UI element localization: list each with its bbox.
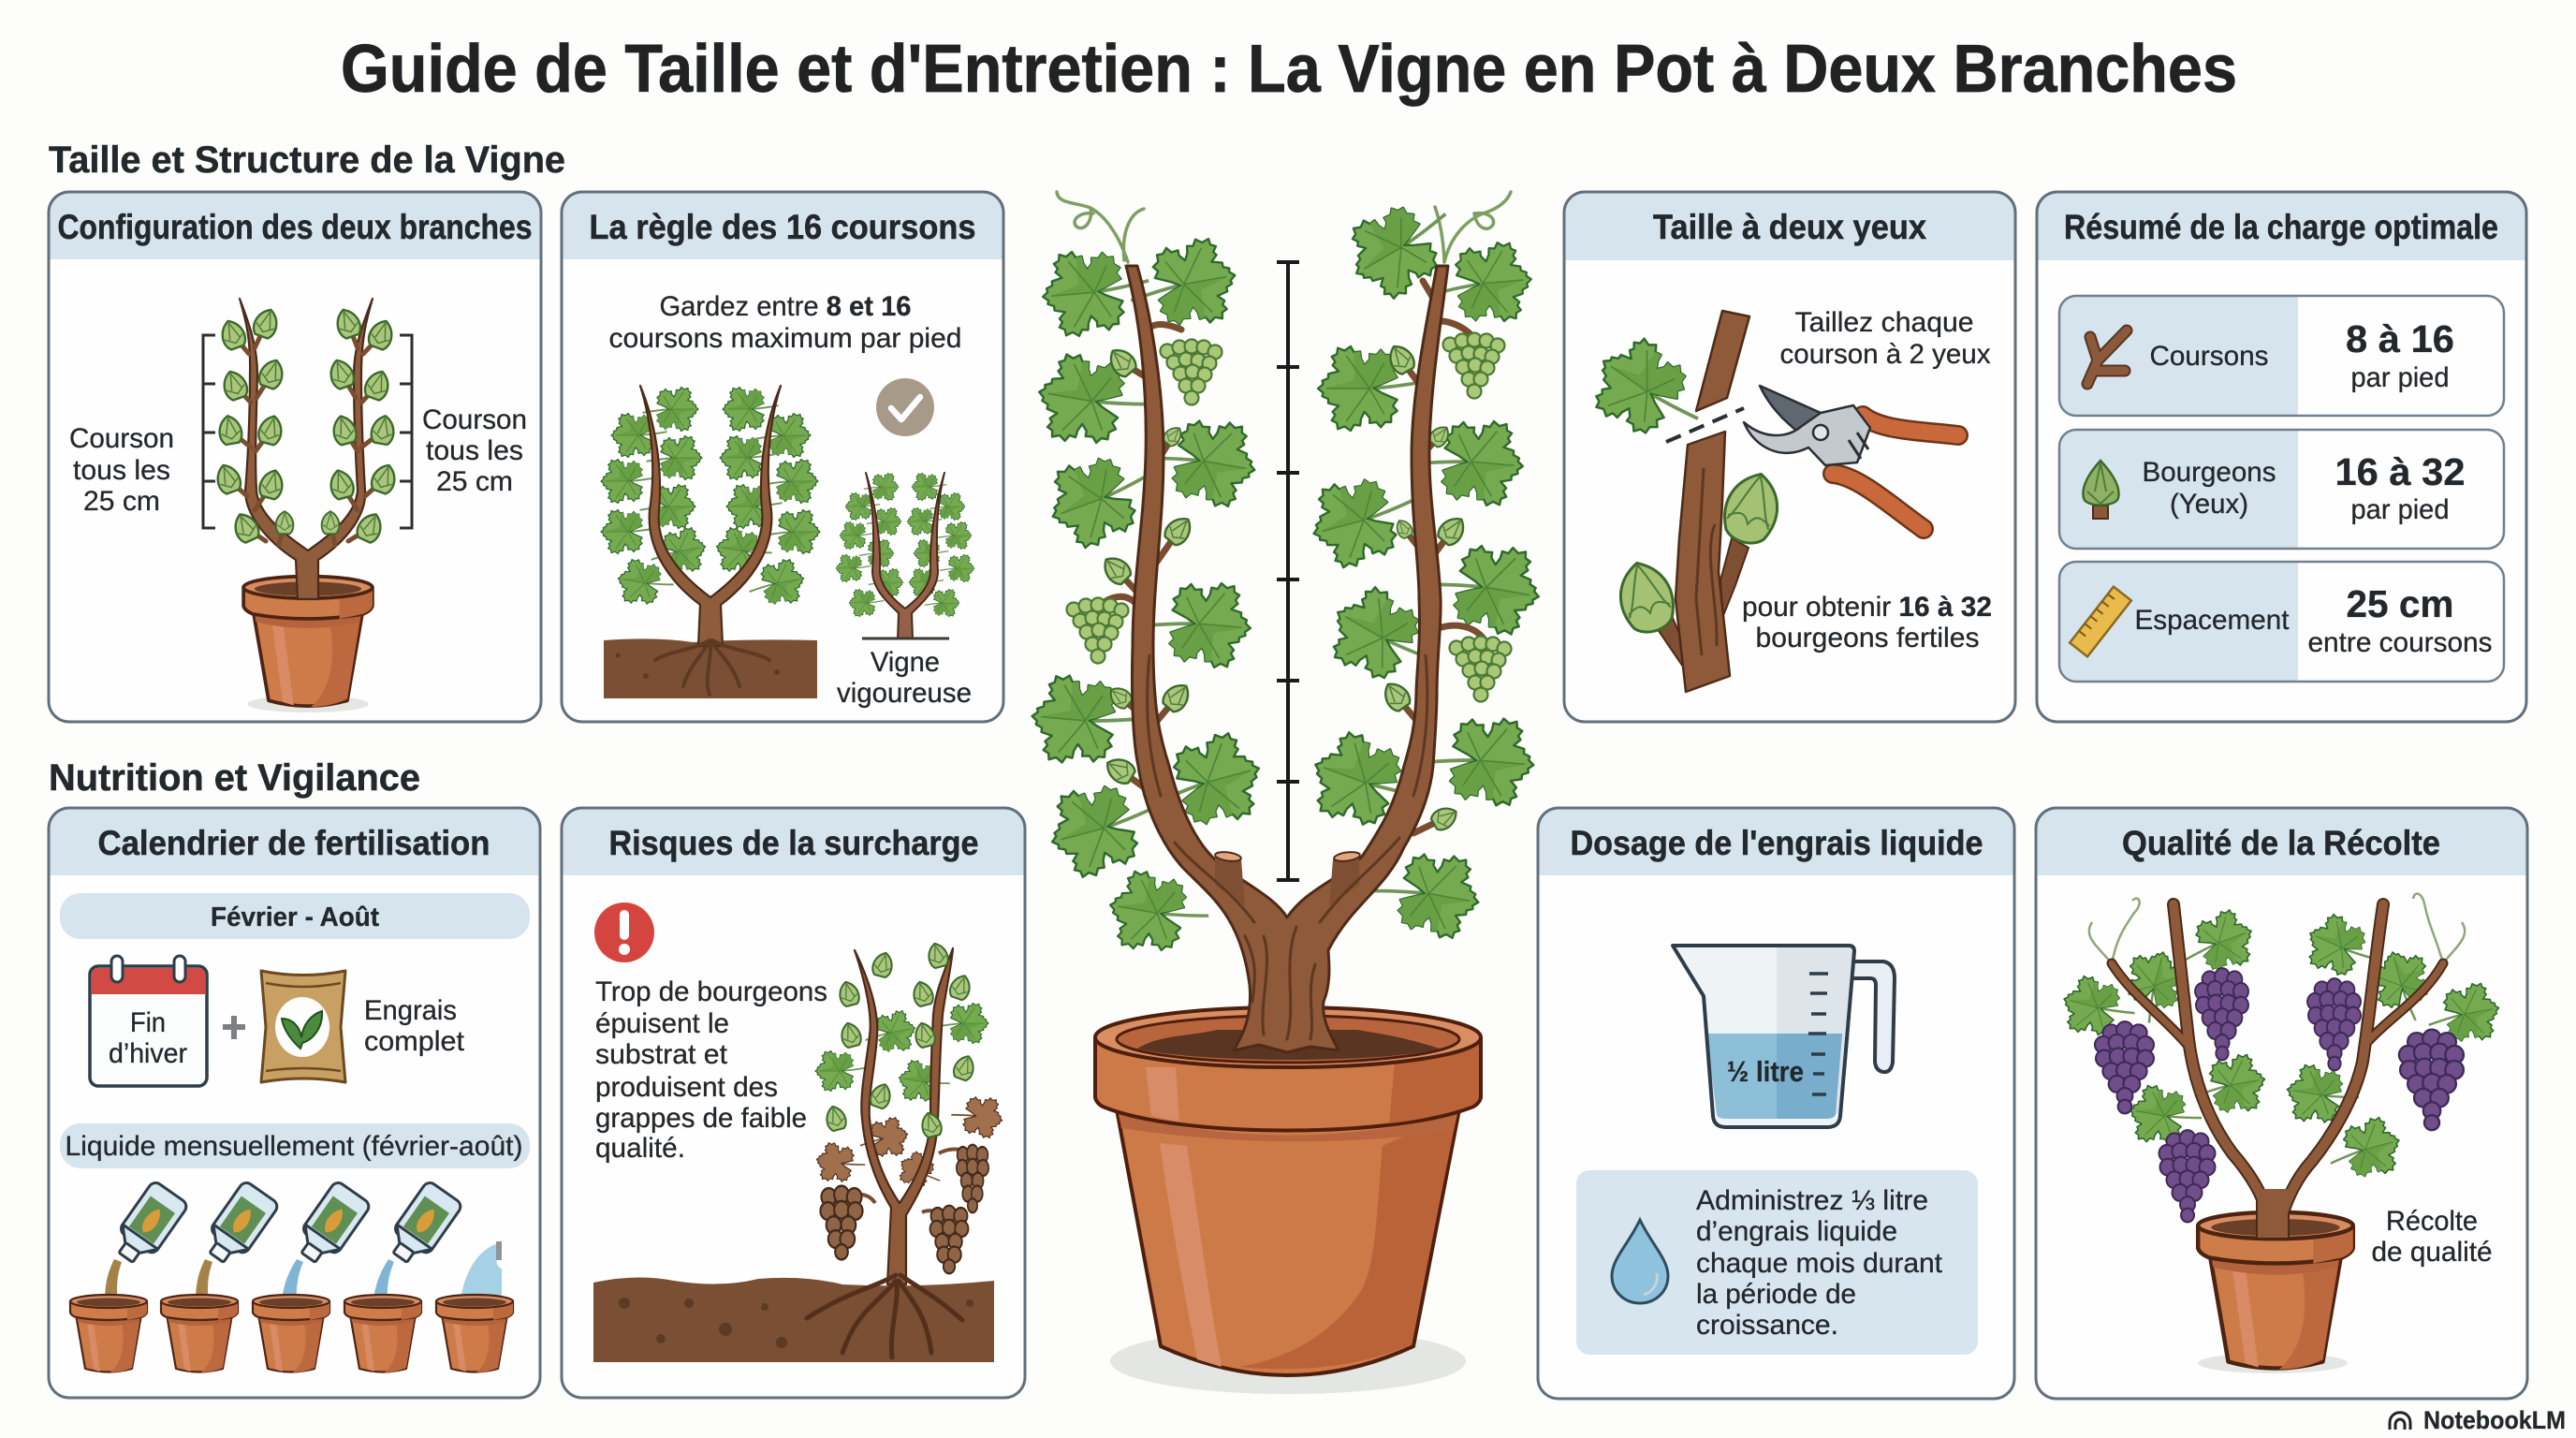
panel heading: Calendrier de fertilisation: [97, 824, 490, 862]
label: left spacing: tous les: [73, 455, 170, 486]
cut line: [1666, 408, 1744, 442]
icon: ruler: [2070, 587, 2131, 656]
label: vigne vigoureuse: Vigne: [871, 647, 940, 678]
label: left spacing: Courson: [69, 423, 174, 454]
panel heading: Qualité de la Récolte: [2122, 824, 2440, 862]
icon: check badge: [876, 378, 934, 436]
panel heading: Configuration des deux branches: [58, 208, 532, 246]
label: right spacing: 25 cm: [436, 466, 513, 497]
cut stubs: [1215, 851, 1360, 906]
label: récolte de qualité: [2372, 1206, 2492, 1268]
buds: [1098, 341, 1470, 832]
pill: liquide mensuellement: [60, 1123, 530, 1168]
row: bourgeons: 16 à 32: [2334, 450, 2466, 493]
pill: février - août: Février - Août: [211, 902, 379, 932]
panel heading: Taille à deux yeux: [1653, 208, 1926, 246]
callout text: Administrez ⅓ litre: [1696, 1185, 1928, 1216]
callout text: croissance.: [1696, 1310, 1838, 1341]
large vine in soil: [601, 386, 820, 698]
central vine illustration: [1029, 183, 1546, 1394]
row: bourgeons: par pied: [2351, 494, 2449, 525]
callout text: [1696, 1185, 1943, 1341]
label: engrais complet: Engrais: [364, 995, 457, 1026]
panel: risques de la surcharge: [562, 808, 1025, 1398]
bud: lower: [1612, 556, 1679, 638]
icon: warning: [594, 902, 654, 962]
row: espacement: 25 cm: [2346, 582, 2454, 625]
warning text: substrat et: [595, 1039, 728, 1070]
label: récolte de qualité: Récolte: [2386, 1206, 2478, 1237]
warning text: Trop de bourgeons: [595, 976, 827, 1007]
warning text: qualité.: [595, 1133, 685, 1164]
label: vigne vigoureuse: vigoureuse: [837, 678, 972, 709]
side shoots: [1097, 281, 1488, 833]
instruction text: [1780, 307, 1990, 370]
grape clusters: [1067, 333, 1511, 702]
NotebookLM logo: NotebookLM: [2423, 1406, 2566, 1434]
panel: qualité de la récolte: [2036, 808, 2527, 1399]
bark texture: [1148, 655, 1427, 1039]
right measure bracket: [400, 335, 412, 528]
small vigorous vine: [836, 473, 974, 638]
heading: Nutrition et Vigilance: Nutrition et Vigilance: [49, 757, 420, 799]
cane lower section with nodes: [1655, 432, 1749, 692]
panel: la règle des 16 coursons: [562, 192, 1003, 722]
row: coursons: Coursons: [2149, 341, 2269, 372]
pots with liquid feed: [70, 1180, 513, 1372]
label: vigne vigoureuse: [837, 647, 972, 709]
pot shadow: [1110, 1328, 1466, 1394]
result text: [1742, 592, 1992, 653]
result text: pour obtenir 16 à 32: [1742, 592, 1992, 623]
row: bourgeons: [2059, 430, 2504, 549]
panel heading: Risques de la surcharge: [608, 824, 979, 862]
rule text: Gardez entre 8 et 16: [659, 291, 912, 322]
fruiting vine in pot: [2056, 894, 2504, 1373]
icon: calendar: [90, 956, 207, 1086]
panel: calendrier de fertilisation: [49, 808, 540, 1398]
warning text: épuisent le: [595, 1008, 729, 1039]
label: left spacing: [69, 423, 174, 517]
callout text: la période de: [1696, 1279, 1856, 1310]
leaf on shoot: [1578, 326, 1719, 460]
row: espacement: Espacement: [2134, 605, 2290, 636]
row: bourgeons: (Yeux): [2170, 489, 2248, 520]
callout text: chaque mois durant: [1696, 1248, 1943, 1279]
label: right spacing: tous les: [426, 435, 523, 466]
icon: measuring jug: ½ litre: [1727, 1055, 1804, 1088]
icon: pruning shears: [1744, 386, 1958, 529]
label: récolte de qualité: de qualité: [2372, 1237, 2492, 1268]
label: left spacing: 25 cm: [83, 486, 160, 517]
vine trunk and branches: [1126, 266, 1448, 1052]
panel: dosage de l'engrais liquide: [1538, 808, 2014, 1399]
cane upper section: [1696, 311, 1749, 411]
callout: dosage: [1576, 1170, 1978, 1355]
icon: calendar: Fin: [130, 1007, 166, 1038]
warning text: [595, 976, 827, 1164]
leaves: [1029, 183, 1546, 961]
icon: water drop: [1612, 1220, 1668, 1303]
panel: résumé de la charge optimale: [2037, 192, 2526, 722]
icon: calendar: d’hiver: [109, 1038, 187, 1069]
icon: fertilizer bag: [261, 971, 345, 1082]
pill: liquide mensuellement: Liquide mensuellement (février-août): [66, 1131, 522, 1162]
exhausted vine in soil: [593, 941, 1005, 1362]
heading: Taille et Structure de la Vigne: Taille et Structure de la Vigne: [49, 139, 565, 181]
callout text: d’engrais liquide: [1696, 1216, 1897, 1247]
rule text: [608, 291, 962, 354]
icon: measuring jug: [1673, 946, 1895, 1127]
result text: bourgeons fertiles: [1756, 623, 1979, 653]
row: espacement: entre coursons: [2308, 627, 2492, 658]
label: right spacing: Courson: [422, 404, 527, 435]
icon: twig: [2087, 330, 2127, 384]
row: espacement: [2059, 562, 2504, 682]
panel: taille à deux yeux: [1564, 192, 2015, 722]
panel heading: Dosage de l'engrais liquide: [1571, 824, 1983, 862]
plus sign: [223, 1016, 245, 1039]
icon: bud: [2083, 461, 2119, 519]
row: coursons: [2059, 296, 2504, 416]
title: Guide de Taille et d'Entretien : La Vigne en Pot à Deux Branches: [341, 32, 2237, 107]
instruction text: courson à 2 yeux: [1780, 339, 1990, 370]
left measure bracket: [203, 335, 215, 528]
label: right spacing: [422, 404, 527, 497]
label: engrais complet: complet: [364, 1026, 465, 1057]
bud: upper: [1719, 467, 1786, 549]
tendrils: [1057, 192, 1511, 262]
row: bourgeons: Bourgeons: [2142, 457, 2276, 488]
panel heading: Résumé de la charge optimale: [2064, 208, 2498, 246]
panel heading: La règle des 16 coursons: [590, 208, 975, 246]
warning text: produisent des: [595, 1072, 778, 1103]
scale bar: [1277, 262, 1299, 880]
instruction text: Taillez chaque: [1795, 307, 1973, 338]
panel: configuration des deux branches: [49, 192, 541, 722]
label: engrais complet: [364, 995, 465, 1057]
rule text: coursons maximum par pied: [608, 323, 962, 354]
potted two-branch vine: [212, 299, 400, 712]
warning text: grappes de faible: [595, 1103, 807, 1134]
row: coursons: par pied: [2351, 362, 2449, 393]
row: coursons: 8 à 16: [2346, 317, 2454, 360]
terracotta pot: [1095, 1007, 1481, 1375]
pill: février - août: [60, 893, 530, 939]
